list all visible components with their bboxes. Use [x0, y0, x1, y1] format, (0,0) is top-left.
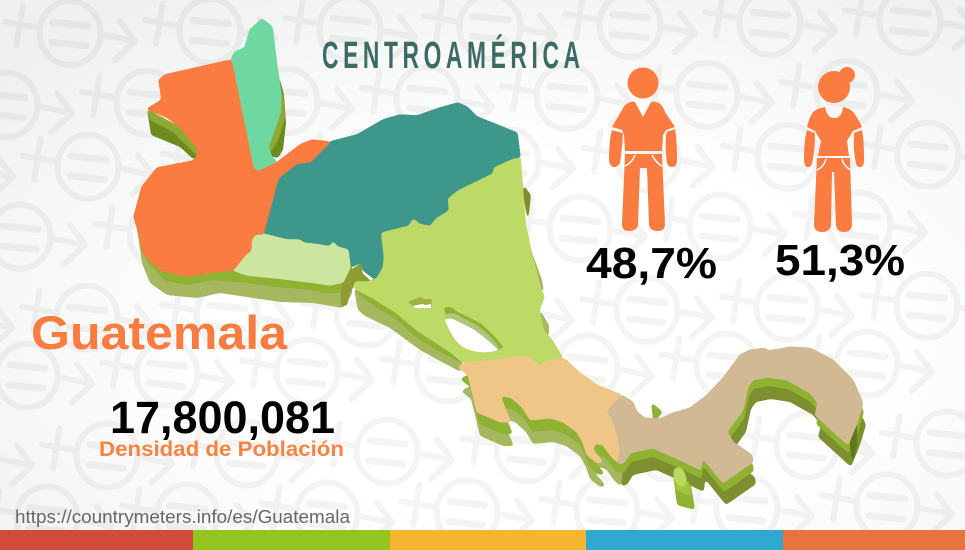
map extrusion: Gulf of Fonseca — [340, 262, 373, 306]
male percentage: 48,7% — [586, 239, 717, 288]
map of Central America — [134, 19, 866, 510]
map extrusion: Belize — [268, 27, 286, 158]
map region: Panama — [607, 347, 863, 483]
title: CENTROAMÉRICA — [322, 34, 580, 76]
map extrusion: Nicaragua Pacific coast — [354, 288, 463, 372]
map region: Guatemala — [134, 60, 330, 276]
bottom colour bar — [0, 530, 965, 550]
map: Lake Nicaragua — [444, 307, 503, 352]
map region: Honduras — [263, 103, 520, 279]
female percentage: 51,3% — [775, 236, 905, 285]
map: Lake Managua — [408, 297, 432, 308]
map region: Belize — [231, 19, 281, 172]
population number: 17,800,081 — [110, 392, 335, 443]
map: Coiba island — [671, 466, 695, 510]
population label: Densidad de Población — [99, 438, 344, 461]
icon: woman — [804, 67, 864, 232]
source url: https://countrymeters.info/es/Guatemala — [15, 507, 351, 527]
map region: Costa Rica — [458, 356, 622, 463]
map extrusion: Costa Rica — [460, 368, 625, 487]
map extrusion: Guatemala north notch — [147, 109, 198, 159]
map region: El Salvador — [233, 234, 350, 285]
country name: Guatemala — [31, 306, 288, 359]
map extrusion: Panama — [608, 356, 866, 505]
map extrusion: Nicaragua Caribbean coast — [520, 150, 549, 337]
map region: Nicaragua — [354, 157, 563, 365]
map extrusion: Guatemala and El Salvador — [136, 222, 352, 308]
icon: man — [609, 68, 677, 231]
